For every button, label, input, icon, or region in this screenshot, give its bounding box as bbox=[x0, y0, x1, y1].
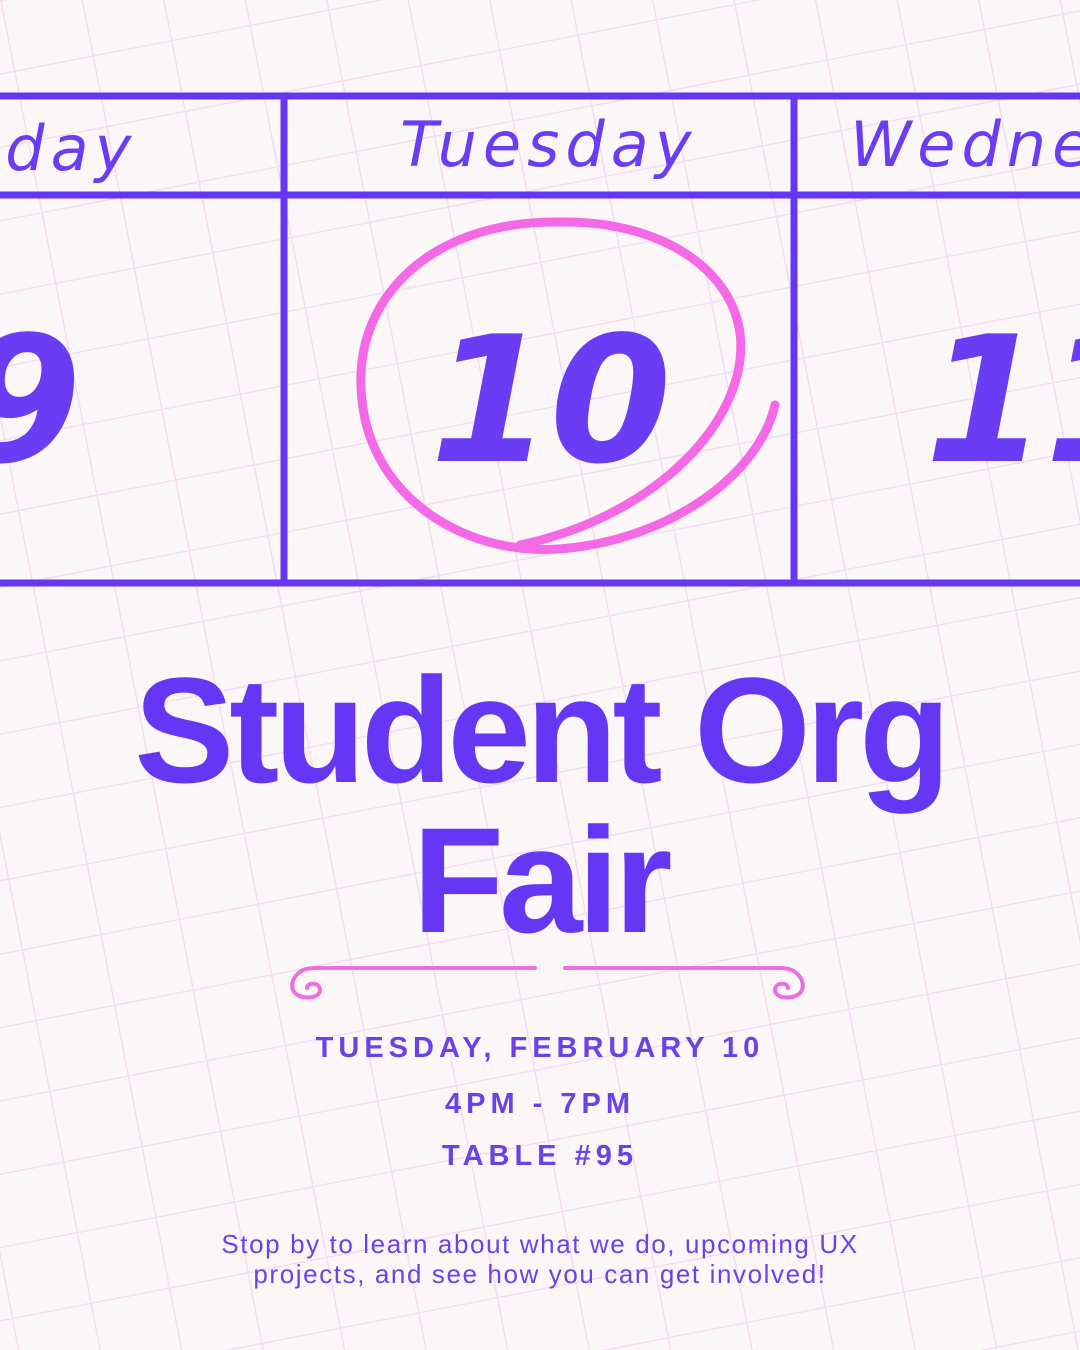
calendar bbox=[0, 92, 1080, 586]
description: Stop by to learn about what we do, upcoming UX bbox=[221, 1229, 859, 1259]
calendar: Tuesday bbox=[400, 108, 697, 181]
title: Student Org bbox=[134, 646, 946, 814]
title: Fair bbox=[412, 796, 668, 964]
pink circle bbox=[361, 222, 775, 550]
event details: TABLE #95 bbox=[442, 1140, 638, 1172]
description bbox=[221, 1229, 859, 1289]
title bbox=[134, 646, 946, 964]
calendar: 10 bbox=[430, 300, 670, 503]
description: projects, and see how you can get involved! bbox=[253, 1259, 827, 1289]
event details: 4PM - 7PM bbox=[445, 1088, 635, 1120]
event details: TUESDAY, FEBRUARY 10 bbox=[316, 1032, 764, 1064]
event details bbox=[316, 1032, 764, 1172]
divider ornament bbox=[290, 966, 805, 1000]
